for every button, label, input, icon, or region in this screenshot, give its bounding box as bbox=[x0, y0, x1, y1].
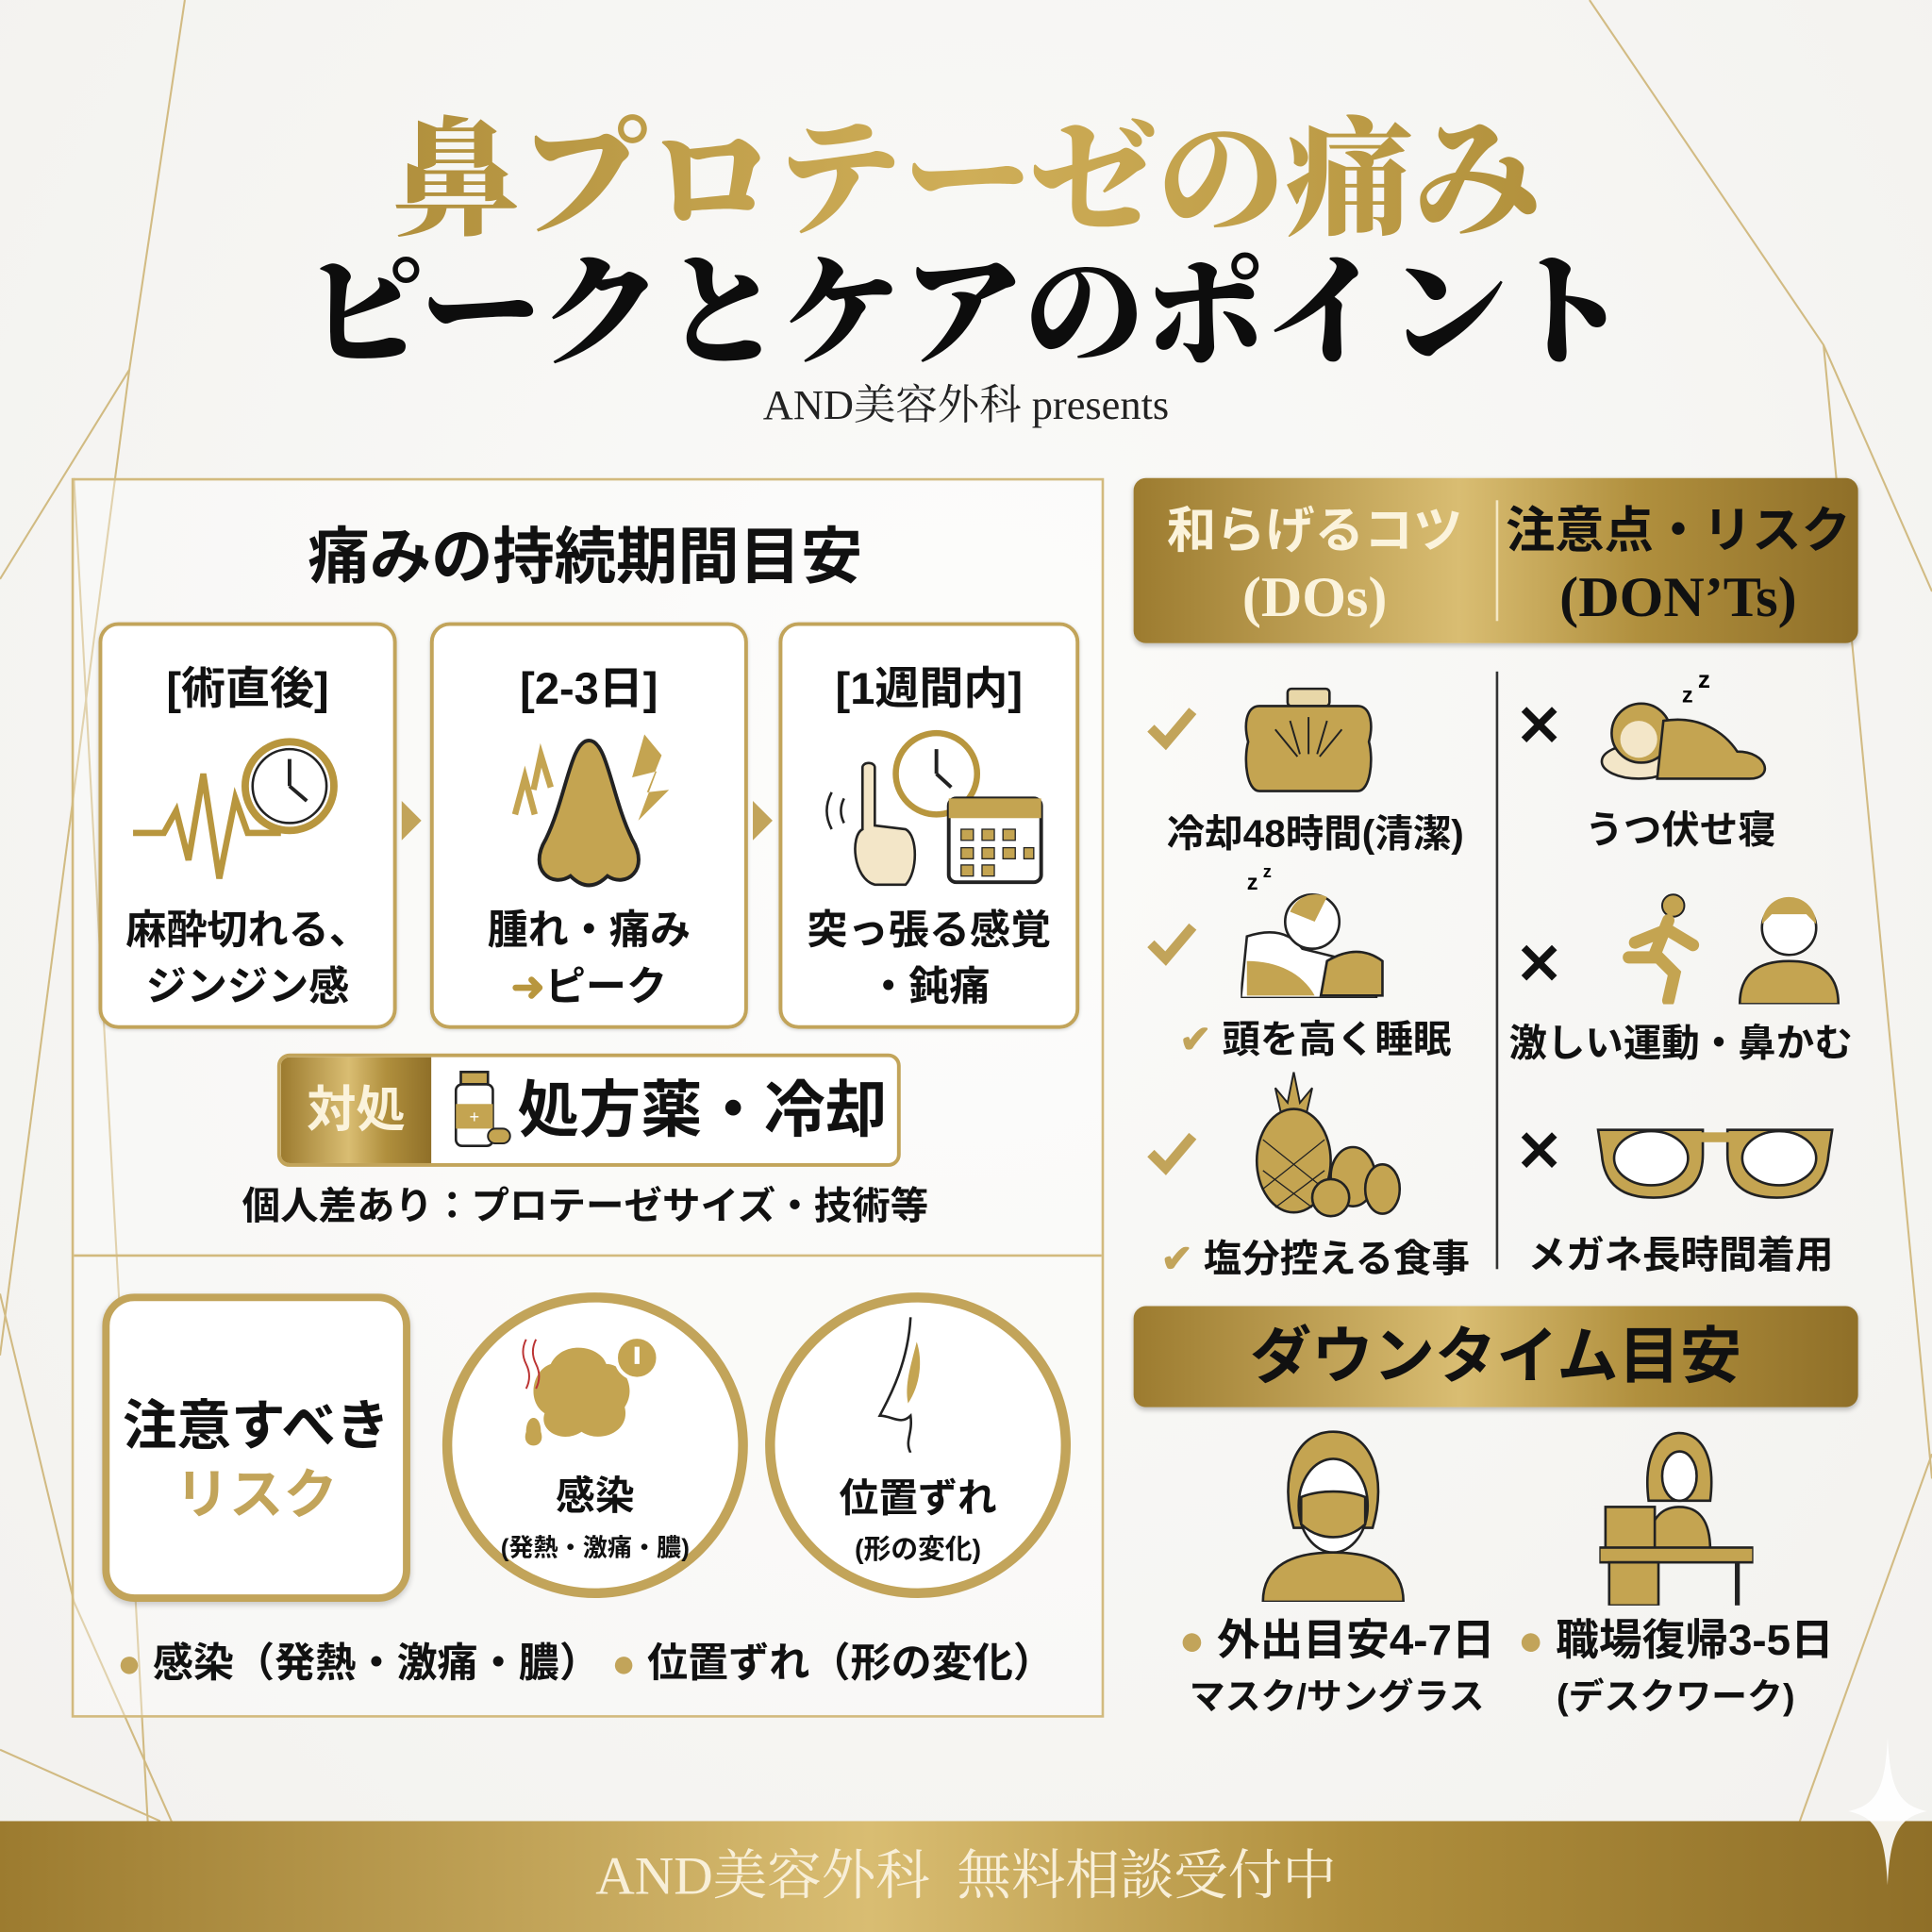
downtime banner: ダウンタイム目安 bbox=[1250, 1322, 1741, 1391]
treatment badge bbox=[277, 1054, 901, 1167]
risk heading box: 注意すべき bbox=[123, 1396, 390, 1457]
treatment badge: 対処 bbox=[307, 1083, 406, 1138]
icon: masked person bbox=[1262, 1430, 1405, 1602]
DON'T: exercise, nose blowing: 激しい運動・鼻かむ bbox=[1508, 1022, 1853, 1064]
DON'T: prone sleep bbox=[1516, 665, 1776, 852]
icon: ice bag bbox=[1245, 687, 1373, 792]
subtitle: AND美容外科 presents bbox=[763, 383, 1169, 429]
card 2 bbox=[430, 623, 748, 1029]
title line 2: ピークとケアのポイント bbox=[305, 217, 1627, 391]
card 3: ・鈍痛 bbox=[868, 963, 990, 1009]
icon: bacteria bbox=[522, 1339, 657, 1445]
title line 1: 鼻プロテーゼの痛み bbox=[391, 76, 1541, 261]
downtime label: work: ● 職場復帰3-5日 bbox=[1518, 1617, 1834, 1665]
title line 1 bbox=[0, 96, 1932, 242]
icon: runner and person bbox=[1623, 893, 1840, 1004]
DON'T: glasses bbox=[1516, 1119, 1834, 1276]
risk bullets: ● 感染（発熱・激痛・膿） ● 位置ずれ（形の変化） bbox=[117, 1640, 1054, 1686]
downtime label: work bbox=[1518, 1617, 1834, 1718]
card 1 bbox=[98, 623, 397, 1029]
card 2: [2-3日] bbox=[520, 663, 658, 713]
icon: nose profile bbox=[877, 1317, 921, 1453]
DON'T: prone sleep: ✕ bbox=[1516, 693, 1563, 758]
header banner: DOs / DON'Ts: 和らげるコツ bbox=[1167, 504, 1462, 558]
icon: sleeping person: z bbox=[1247, 870, 1258, 894]
downtime label: outing: ● 外出目安4-7日 bbox=[1179, 1617, 1495, 1665]
panel: pain duration bbox=[72, 478, 1104, 1718]
icon: pulse and clock bbox=[133, 738, 338, 879]
risk circle: infection: 感染 bbox=[556, 1474, 635, 1518]
treatment badge: 処方薬・冷却 bbox=[518, 1075, 887, 1144]
header banner: DOs / DON'Ts bbox=[1134, 478, 1858, 643]
icon: medicine bottle bbox=[455, 1071, 511, 1147]
arrow bbox=[753, 801, 773, 841]
downtime label: outing: マスク/サングラス bbox=[1190, 1678, 1485, 1718]
icon: prone sleeping person: z bbox=[1682, 682, 1693, 707]
card 1: [術直後] bbox=[166, 663, 329, 713]
downtime banner bbox=[1134, 1306, 1858, 1407]
DO: sleep head high bbox=[1147, 862, 1451, 1061]
check bbox=[1147, 1132, 1196, 1175]
DON'T: prone sleep: うつ伏せ寝 bbox=[1585, 808, 1776, 852]
icon: prone sleeping person: z bbox=[1698, 665, 1710, 693]
risk circle: infection bbox=[442, 1292, 748, 1598]
card 1: ジンジン感 bbox=[146, 963, 349, 1009]
footer bar bbox=[0, 1821, 1932, 1932]
footer bar: AND美容外科 無料相談受付中 bbox=[595, 1846, 1337, 1907]
icon: prone sleeping person bbox=[1600, 665, 1766, 780]
DON'T: glasses: ✕ bbox=[1516, 1119, 1563, 1183]
card 1: 麻酔切れる、 bbox=[125, 907, 370, 953]
header banner: DOs / DON'Ts: 注意点・リスク bbox=[1506, 504, 1851, 558]
panel heading: 痛みの持続期間目安 bbox=[308, 523, 862, 591]
DO: low salt food: ✔ 塩分控える食事 bbox=[1161, 1237, 1470, 1280]
column divider bbox=[1496, 672, 1498, 1269]
card 3: 突っ張る感覚 bbox=[808, 907, 1051, 953]
DON'T: exercise, nose blowing bbox=[1508, 893, 1853, 1064]
risk circle: infection: (発熱・激痛・膿) bbox=[501, 1535, 690, 1562]
icon: medicine bottle: + bbox=[470, 1107, 479, 1126]
card 3 bbox=[778, 623, 1079, 1029]
DO: sleep head high: ✔ 頭を高く睡眠 bbox=[1179, 1018, 1451, 1061]
risk heading box bbox=[102, 1293, 410, 1602]
downtime label: work: (デスクワーク) bbox=[1557, 1678, 1795, 1718]
downtime label: outing bbox=[1179, 1617, 1495, 1718]
card 2: ➜ピーク bbox=[511, 963, 667, 1009]
risk circle: displacement bbox=[765, 1292, 1071, 1598]
risk heading box: リスク bbox=[175, 1465, 338, 1525]
icon: glasses bbox=[1596, 1128, 1834, 1199]
icon: sparkle bbox=[1849, 1741, 1926, 1885]
risk circle: displacement: 位置ずれ bbox=[839, 1476, 997, 1521]
DO: low salt food bbox=[1147, 1072, 1470, 1280]
arrow bbox=[402, 801, 422, 841]
check bbox=[1147, 923, 1196, 966]
header banner: DOs / DON'Ts: (DOs) bbox=[1242, 566, 1387, 628]
note: 個人差あり：プロテーゼサイズ・技術等 bbox=[242, 1184, 928, 1227]
icon: finger, clock, calendar bbox=[825, 730, 1043, 887]
check bbox=[1147, 708, 1196, 751]
icon: desk worker bbox=[1599, 1432, 1754, 1606]
icon: sleeping person bbox=[1241, 862, 1384, 998]
DON'T: glasses: メガネ長時間着用 bbox=[1528, 1233, 1834, 1276]
card 2: 腫れ・痛み bbox=[488, 907, 691, 953]
risk circle: displacement: (形の変化) bbox=[855, 1534, 981, 1565]
header banner: DOs / DON'Ts: (DON’Ts) bbox=[1559, 566, 1797, 628]
icon: swollen nose bbox=[511, 734, 670, 887]
icon: fruits bbox=[1255, 1072, 1402, 1217]
card 3: [1週間内] bbox=[836, 663, 1023, 713]
DON'T: exercise, nose blowing: ✕ bbox=[1516, 931, 1563, 995]
DO: cooling: 冷却48時間(清潔) bbox=[1167, 812, 1464, 855]
DO: cooling bbox=[1147, 687, 1464, 855]
